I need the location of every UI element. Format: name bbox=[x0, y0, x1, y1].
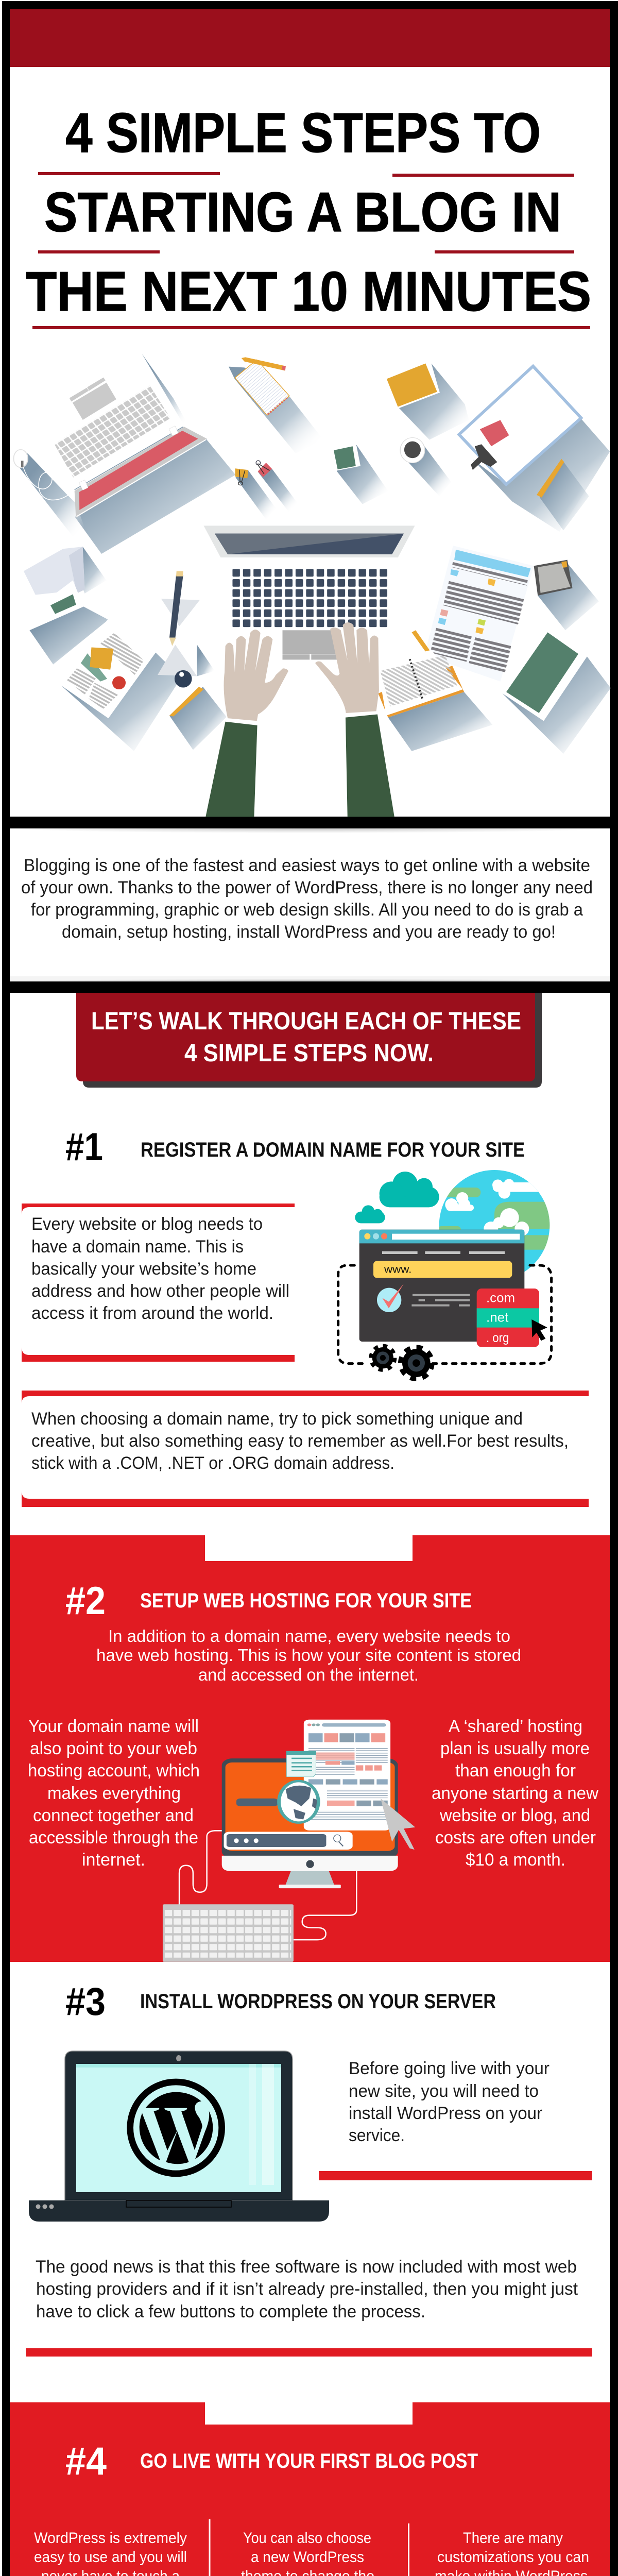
icon: browser window bbox=[359, 1230, 524, 1342]
step 1 domain tips box: stick with a .COM, .NET or .ORG domain address. bbox=[31, 1453, 394, 1473]
step 2 right text: $10 a month. bbox=[466, 1850, 565, 1870]
step 2 right text bbox=[432, 1717, 598, 1870]
step 3 side text: Before going live with your bbox=[349, 2059, 550, 2078]
step 1 text box: have a domain name. This is bbox=[31, 1237, 244, 1257]
step 3 body text: have to click a few buttons to complete the process. bbox=[36, 2302, 425, 2321]
step 2 intro text bbox=[96, 1626, 521, 1684]
step 1 heading: #1 bbox=[65, 1125, 103, 1169]
step 4 column 1 bbox=[31, 2530, 191, 2576]
icon: domain registration illustration bbox=[338, 1170, 553, 1379]
icon: domain extensions list: .com bbox=[486, 1291, 515, 1306]
icon: domain extensions list: . org bbox=[486, 1331, 509, 1345]
step 1 domain tips box: creative, but also something easy to remember as well.For best results, bbox=[31, 1431, 569, 1451]
step 3 side text bbox=[319, 2059, 592, 2180]
step 2 left text: also point to your web bbox=[30, 1739, 197, 1758]
icon: clouds bbox=[355, 1172, 439, 1223]
title bbox=[26, 101, 591, 323]
step 1 text box: basically your website’s home bbox=[31, 1259, 256, 1279]
step 1 domain tips box: When choosing a domain name, try to pick something unique and bbox=[31, 1409, 523, 1429]
step 2 left text: makes everything bbox=[47, 1784, 181, 1803]
panel: introduction bbox=[10, 828, 610, 981]
step 2 intro text: and accessed on the internet. bbox=[198, 1665, 419, 1684]
step 1 text box: access it from around the world. bbox=[31, 1303, 273, 1323]
callout: let's walk through bbox=[76, 993, 542, 1088]
step 3 side text: service. bbox=[349, 2126, 405, 2145]
callout: let's walk through: LET’S WALK THROUGH EACH OF THESE bbox=[91, 1008, 521, 1035]
step 2 right text: plan is usually more bbox=[440, 1739, 590, 1758]
step 3 body text: The good news is that this free software is now included with most web bbox=[36, 2257, 577, 2277]
step 3 body text: hosting providers and if it isn’t already pre-installed, then you might just bbox=[36, 2279, 578, 2299]
step 2 left text: Your domain name will bbox=[28, 1717, 199, 1736]
step 4 column 3: There are many bbox=[463, 2530, 563, 2547]
step 1 heading bbox=[65, 1125, 525, 1169]
step 3 heading: INSTALL WORDPRESS ON YOUR SERVER bbox=[140, 1990, 496, 2013]
step 2 left text: hosting account, which bbox=[28, 1761, 200, 1781]
cursor bbox=[381, 1799, 415, 1850]
step 2 right text: A ‘shared’ hosting bbox=[449, 1717, 582, 1736]
step 1 text box: address and how other people will bbox=[31, 1281, 289, 1301]
desk objects: main laptop and documents bbox=[24, 362, 611, 817]
step 3 side text: new site, you will need to bbox=[349, 2081, 539, 2101]
note bbox=[286, 1751, 316, 1777]
step 4 heading bbox=[65, 2439, 478, 2483]
step 4 column 2: You can also choose bbox=[243, 2530, 371, 2547]
step 2 right text: website or blog, and bbox=[439, 1806, 590, 1825]
icon: browser window: www. bbox=[384, 1264, 411, 1276]
step 2 intro text: have web hosting. This is how your site content is stored bbox=[96, 1646, 521, 1665]
step 4 column 2: a new WordPress bbox=[251, 2549, 364, 2566]
step 2 left text: connect together and bbox=[33, 1806, 194, 1825]
arrow divider 1 bbox=[200, 2519, 220, 2576]
icon: domain extensions list: .net bbox=[486, 1311, 508, 1325]
step 2 heading: #2 bbox=[65, 1579, 106, 1623]
search bar bbox=[224, 1832, 353, 1850]
intro text: of your own. Thanks to the power of WordPress, there is no longer any need bbox=[21, 878, 593, 897]
step 2 left text: accessible through the bbox=[29, 1828, 198, 1848]
step 2 left text: internet. bbox=[82, 1850, 145, 1870]
icon: WordPress logo bbox=[130, 2082, 222, 2174]
step 4 column 3: customizations you can bbox=[437, 2549, 589, 2566]
step 1 domain tips box bbox=[22, 1391, 589, 1507]
callout: let's walk through: 4 SIMPLE STEPS NOW. bbox=[184, 1040, 434, 1067]
step 3 side text: install WordPress on your bbox=[349, 2104, 542, 2123]
step 2 right text: than enough for bbox=[455, 1761, 576, 1781]
step 4 column 3 bbox=[432, 2530, 594, 2576]
dark red header band bbox=[10, 9, 610, 67]
intro text: domain, setup hosting, install WordPress and you are ready to go! bbox=[62, 922, 556, 942]
step 1 heading: REGISTER A DOMAIN NAME FOR YOUR SITE bbox=[141, 1139, 525, 1161]
step 3 heading bbox=[65, 1980, 496, 2024]
icon: laptop with WordPress logo bbox=[29, 2051, 329, 2222]
step 4 heading: #4 bbox=[65, 2439, 107, 2483]
magnifier with globe bbox=[236, 1799, 278, 1806]
step 4 heading: GO LIVE WITH YOUR FIRST BLOG POST bbox=[140, 2450, 478, 2472]
step 4 column 1: easy to use and you will bbox=[34, 2549, 187, 2566]
keyboard bbox=[163, 1904, 294, 1962]
panel: step 2 bbox=[10, 1535, 610, 1962]
step 4 column 1: WordPress is extremely bbox=[34, 2530, 187, 2547]
desk objects upper left: laptop, notepad, clips bbox=[13, 354, 323, 554]
panel: title header bbox=[10, 9, 610, 817]
step 4 column 2 bbox=[241, 2530, 374, 2576]
icon: gears bbox=[371, 1346, 432, 1379]
icon: globe bbox=[439, 1170, 550, 1272]
step 2 heading bbox=[65, 1579, 472, 1623]
panel: steps white background bbox=[10, 993, 610, 2430]
icon: computer with web page and keyboard bbox=[163, 1720, 415, 1962]
icon: domain extensions list bbox=[477, 1289, 547, 1347]
panel: step 4 bbox=[10, 2402, 610, 2576]
step 1 text box: Every website or blog needs to bbox=[31, 1214, 263, 1234]
arrow divider 2 bbox=[400, 2523, 418, 2576]
illustration: desk with laptop and hands bbox=[13, 354, 611, 817]
step 2 intro text: In addition to a domain name, every website needs to bbox=[108, 1626, 510, 1646]
step 2 heading: SETUP WEB HOSTING FOR YOUR SITE bbox=[140, 1589, 472, 1612]
title: 4 SIMPLE STEPS TO bbox=[65, 101, 541, 164]
step 3 body text bbox=[26, 2257, 592, 2357]
intro text bbox=[21, 856, 593, 942]
step 2 left text bbox=[28, 1717, 200, 1870]
step 2 right text: anyone starting a new bbox=[432, 1784, 598, 1803]
intro text: for programming, graphic or web design skills. All you need to do is grab a bbox=[31, 900, 583, 920]
step 3 heading: #3 bbox=[65, 1980, 106, 2024]
title: STARTING A BLOG IN bbox=[44, 181, 561, 244]
step 1 text box bbox=[22, 1204, 295, 1362]
step 2 right text: costs are often under bbox=[435, 1828, 596, 1848]
web page bbox=[304, 1720, 390, 1831]
intro text: Blogging is one of the fastest and easiest ways to get online with a website bbox=[24, 856, 590, 875]
